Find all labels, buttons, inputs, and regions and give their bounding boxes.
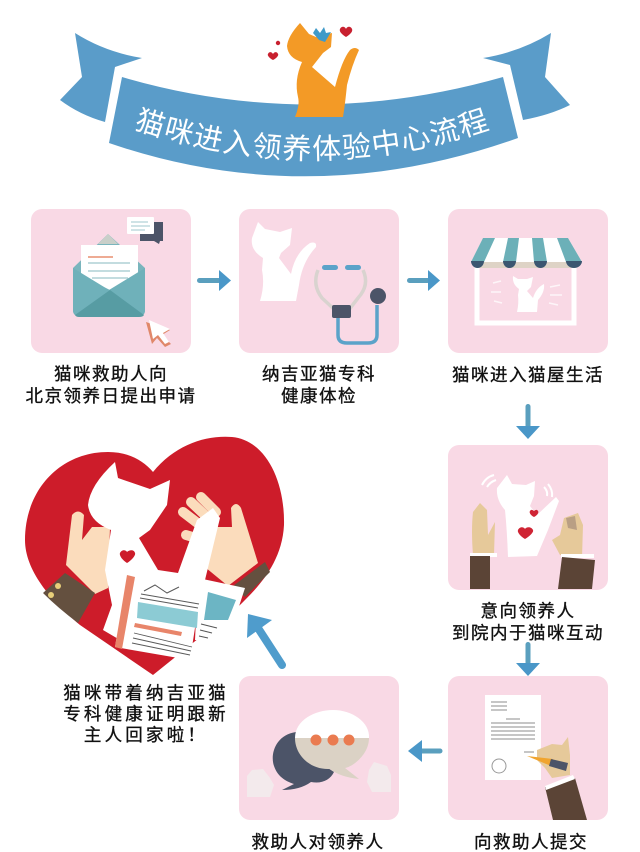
icon: white cat heads bbox=[247, 769, 274, 797]
panel: step 2 checkup bbox=[239, 209, 399, 353]
icon: light speech bubble bbox=[295, 710, 369, 738]
icon: motion lines bbox=[482, 475, 552, 497]
right hand bbox=[183, 497, 216, 538]
arrow: step 2 to 3 bbox=[407, 270, 440, 291]
icon: letter bbox=[81, 245, 138, 290]
panel: step 4 interaction bbox=[448, 445, 608, 590]
ribbon main band bbox=[109, 77, 518, 176]
icon: stethoscope bbox=[316, 270, 377, 343]
document chart bbox=[144, 585, 179, 593]
icon: sleeve bbox=[545, 778, 587, 820]
icon: left hand and sleeve bbox=[472, 503, 495, 555]
icon: cursor bbox=[146, 322, 171, 347]
panel: step 1 apply bbox=[31, 209, 191, 353]
heart on cat bbox=[120, 550, 135, 563]
icon: speech bubbles bbox=[140, 222, 163, 244]
step 2 label: 健康体检 bbox=[281, 386, 357, 406]
step 4 label: 到院内于猫咪互动 bbox=[452, 623, 604, 643]
icon: small white cat bbox=[513, 276, 544, 312]
title banner bbox=[60, 23, 570, 176]
icon: document bbox=[485, 695, 541, 780]
step 4 label bbox=[452, 601, 604, 643]
step 5 label: 向救助人提交 bbox=[474, 832, 588, 852]
final label bbox=[63, 683, 229, 745]
step 3 label: 猫咪进入猫屋生活 bbox=[452, 365, 604, 385]
final label: 主人回家啦！ bbox=[84, 725, 208, 745]
arrow: step 3 to 4 bbox=[516, 404, 540, 439]
panel: step 5 submit bbox=[448, 676, 608, 820]
final label: 猫咪带着纳吉亚猫 bbox=[63, 683, 229, 703]
ribbon right tail bbox=[483, 33, 570, 120]
heart bbox=[25, 437, 284, 675]
icon: orange cat bbox=[287, 23, 359, 117]
left sleeve bbox=[43, 573, 95, 623]
left hand bbox=[66, 512, 110, 594]
white cat bbox=[88, 462, 220, 640]
icon: dark speech bubble bbox=[273, 732, 334, 790]
step 1 label bbox=[26, 364, 196, 406]
icon: shop window bbox=[477, 265, 574, 323]
step 4 label: 意向领养人 bbox=[480, 601, 576, 621]
panel: step 6 chat bbox=[239, 676, 399, 820]
arrow: step 4 to 5 bbox=[516, 642, 540, 676]
icon: crown bbox=[313, 27, 331, 42]
final label: 专科健康证明跟新 bbox=[63, 704, 229, 724]
front document bbox=[115, 575, 202, 660]
step 2 label bbox=[262, 364, 376, 406]
icon: awning bbox=[471, 238, 582, 262]
title text: 猫咪进入领养体验中心流程 bbox=[136, 106, 490, 162]
step 1 label: 猫咪救助人向 bbox=[54, 364, 168, 384]
step 6 label: 救助人对领养人 bbox=[252, 832, 384, 852]
arrow: step 6 to final bbox=[247, 614, 282, 665]
icon: white cat bbox=[252, 222, 316, 301]
icon: hearts bbox=[268, 27, 352, 60]
icon: envelope back bbox=[73, 234, 145, 316]
panel: final red heart illustration bbox=[25, 437, 284, 675]
back document bbox=[195, 578, 245, 640]
step 1 label: 北京领养日提出申请 bbox=[26, 386, 196, 406]
icon: envelope front bbox=[73, 268, 145, 316]
step 2 label: 纳吉亚猫专科 bbox=[262, 364, 376, 384]
icon: hand with pen bbox=[537, 737, 570, 778]
panel: step 3 cat house bbox=[448, 209, 608, 353]
arrow: step 1 to 2 bbox=[197, 270, 231, 291]
icon: white cat with hearts bbox=[497, 475, 559, 557]
decorative sparkle lines bbox=[491, 281, 562, 305]
arrow: step 5 to 6 bbox=[408, 740, 442, 762]
right sleeve bbox=[233, 562, 270, 597]
icon: dots bbox=[310, 734, 354, 746]
icon: right hand and sleeve bbox=[552, 513, 583, 558]
ribbon left tail bbox=[60, 33, 142, 122]
